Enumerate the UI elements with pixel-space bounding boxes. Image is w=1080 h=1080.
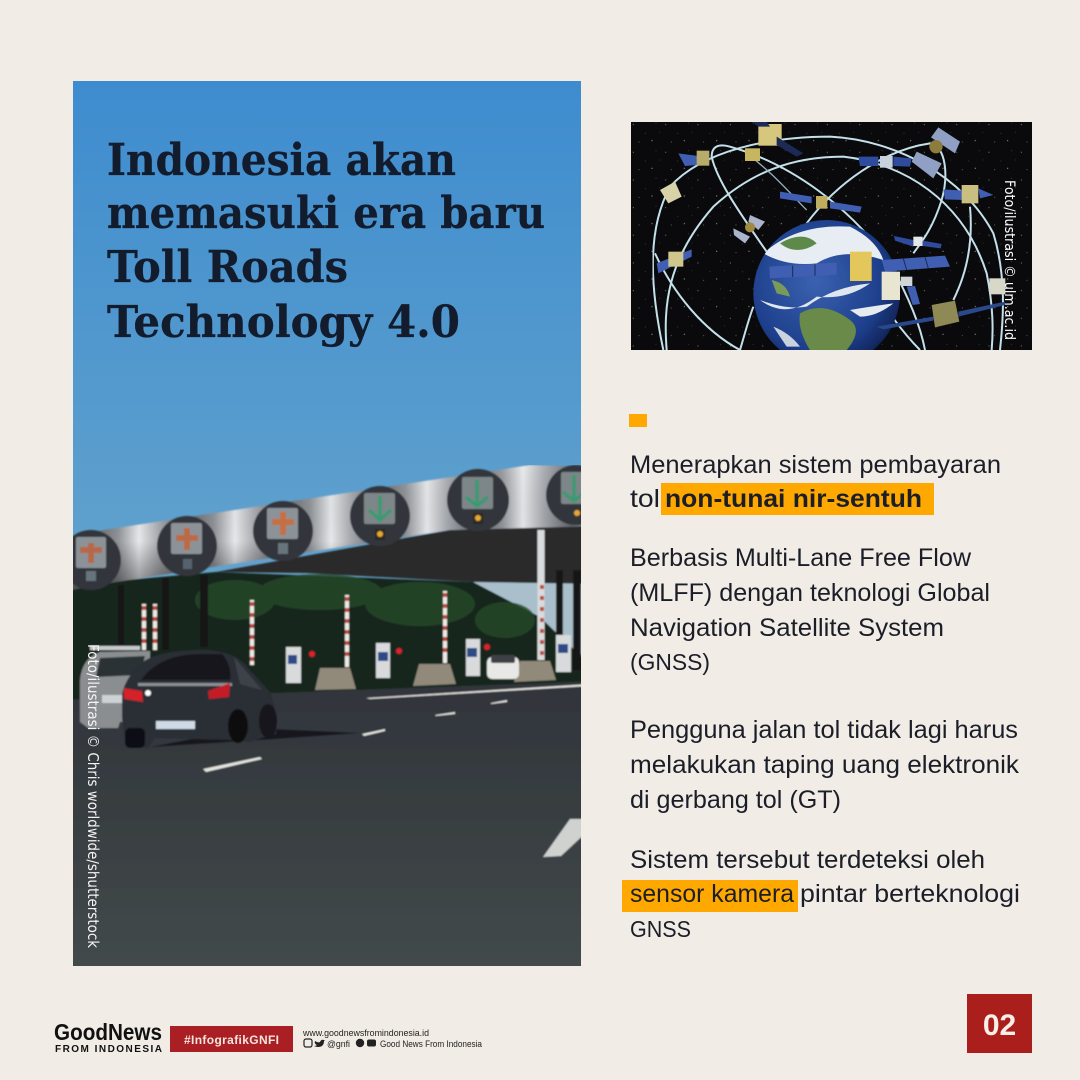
stars bbox=[631, 122, 1032, 350]
accent square bbox=[629, 414, 647, 427]
hashtag badge: #InfografikGNFI bbox=[184, 1033, 279, 1047]
text block: MLFF GNSS: (GNSS) bbox=[630, 649, 710, 675]
hashtag badge bbox=[170, 1026, 293, 1052]
text block: camera sensor: GNSS bbox=[630, 916, 691, 942]
footer logo: GoodNews from Indonesia: FROM INDONESIA bbox=[55, 1044, 162, 1055]
lane markings bbox=[203, 684, 590, 857]
text block: MLFF GNSS: Navigation Satellite System bbox=[630, 614, 944, 642]
text block: non-cash payment: tol bbox=[630, 485, 660, 513]
text block: camera sensor bbox=[622, 846, 1020, 942]
car shadow bbox=[150, 728, 360, 747]
footer contacts: Good News From Indonesia bbox=[380, 1039, 482, 1049]
satellites: small constellation bbox=[657, 122, 1005, 294]
gantry underside bbox=[216, 526, 595, 584]
dark blue peugeot car bbox=[122, 650, 277, 748]
concrete barriers bbox=[315, 661, 556, 690]
page number badge bbox=[967, 994, 1032, 1053]
text block: non-cash payment bbox=[630, 451, 1001, 515]
page number badge: 02 bbox=[983, 1009, 1016, 1042]
lane signal: green 1 bbox=[350, 486, 410, 546]
text block: no more tapping bbox=[630, 716, 1020, 814]
lane signal: green 3 bbox=[545, 465, 581, 526]
highlight: sensor kamera: sensor kamera bbox=[630, 880, 794, 908]
toll booths bbox=[286, 635, 571, 683]
silver car bbox=[80, 646, 150, 728]
icon: twitter bbox=[314, 1040, 325, 1047]
orbits bbox=[653, 137, 1003, 350]
satellite: central with large panels bbox=[769, 252, 950, 305]
text block: non-cash payment: Menerapkan sistem pembayaran bbox=[630, 451, 1001, 479]
satellite: lower right bbox=[877, 301, 1005, 329]
footer contacts bbox=[302, 1028, 482, 1049]
road surface bbox=[60, 681, 595, 980]
lane signal: red 1 bbox=[73, 529, 122, 590]
distant light sky bbox=[472, 580, 581, 656]
text block: no more tapping: Pengguna jalan tol tidak lagi harus bbox=[630, 716, 1018, 744]
gantry pillars bbox=[118, 570, 581, 670]
panel: toll gate photo bbox=[60, 81, 606, 980]
lane signal: red 3 bbox=[253, 501, 313, 561]
lane signal: red 2 bbox=[157, 516, 217, 576]
lane signal: green 2 bbox=[447, 469, 509, 531]
icon: youtube bbox=[367, 1040, 376, 1046]
heading bbox=[107, 135, 545, 348]
white car in distance bbox=[487, 655, 519, 679]
footer logo: GoodNews from Indonesia bbox=[54, 1019, 162, 1055]
footer contacts: @gnfi bbox=[327, 1039, 350, 1049]
highlight: non-tunai nir-sentuh: non-tunai nir-sentuh bbox=[665, 485, 922, 513]
heading: memasuki era baru bbox=[107, 188, 545, 239]
text block: no more tapping: melakukan taping uang elektronik bbox=[630, 751, 1020, 779]
icon: facebook bbox=[356, 1039, 364, 1047]
text block: MLFF GNSS: Berbasis Multi-Lane Free Flow bbox=[630, 544, 972, 572]
text block: camera sensor: pintar berteknologi bbox=[800, 880, 1020, 908]
footer contacts: www.goodnewsfromindonesia.id bbox=[302, 1028, 429, 1038]
barrier posts bbox=[144, 530, 541, 667]
globe bbox=[753, 220, 900, 350]
heading: Toll Roads bbox=[107, 242, 348, 293]
photo credit: satellite: Foto/ilustrasi © ulm.ac.id bbox=[1001, 180, 1017, 340]
text block: no more tapping: di gerbang tol (GT) bbox=[630, 786, 841, 814]
heading: Indonesia akan bbox=[107, 135, 456, 186]
footer logo: GoodNews from Indonesia: GoodNews bbox=[54, 1019, 162, 1045]
icon: instagram bbox=[304, 1039, 312, 1047]
trees bbox=[60, 572, 595, 700]
gantry tube bbox=[60, 465, 595, 592]
heading: Technology 4.0 bbox=[107, 297, 460, 348]
panel: satellite photo bbox=[631, 122, 1032, 367]
text block: MLFF GNSS: (MLFF) dengan teknologi Global bbox=[630, 579, 990, 607]
text block: camera sensor: Sistem tersebut terdeteksi oleh bbox=[630, 846, 985, 874]
text block: MLFF GNSS bbox=[630, 544, 990, 675]
photo credit: toll gate: Foto/ilustrasi © Chris worldwide/shutterstock bbox=[84, 644, 102, 948]
